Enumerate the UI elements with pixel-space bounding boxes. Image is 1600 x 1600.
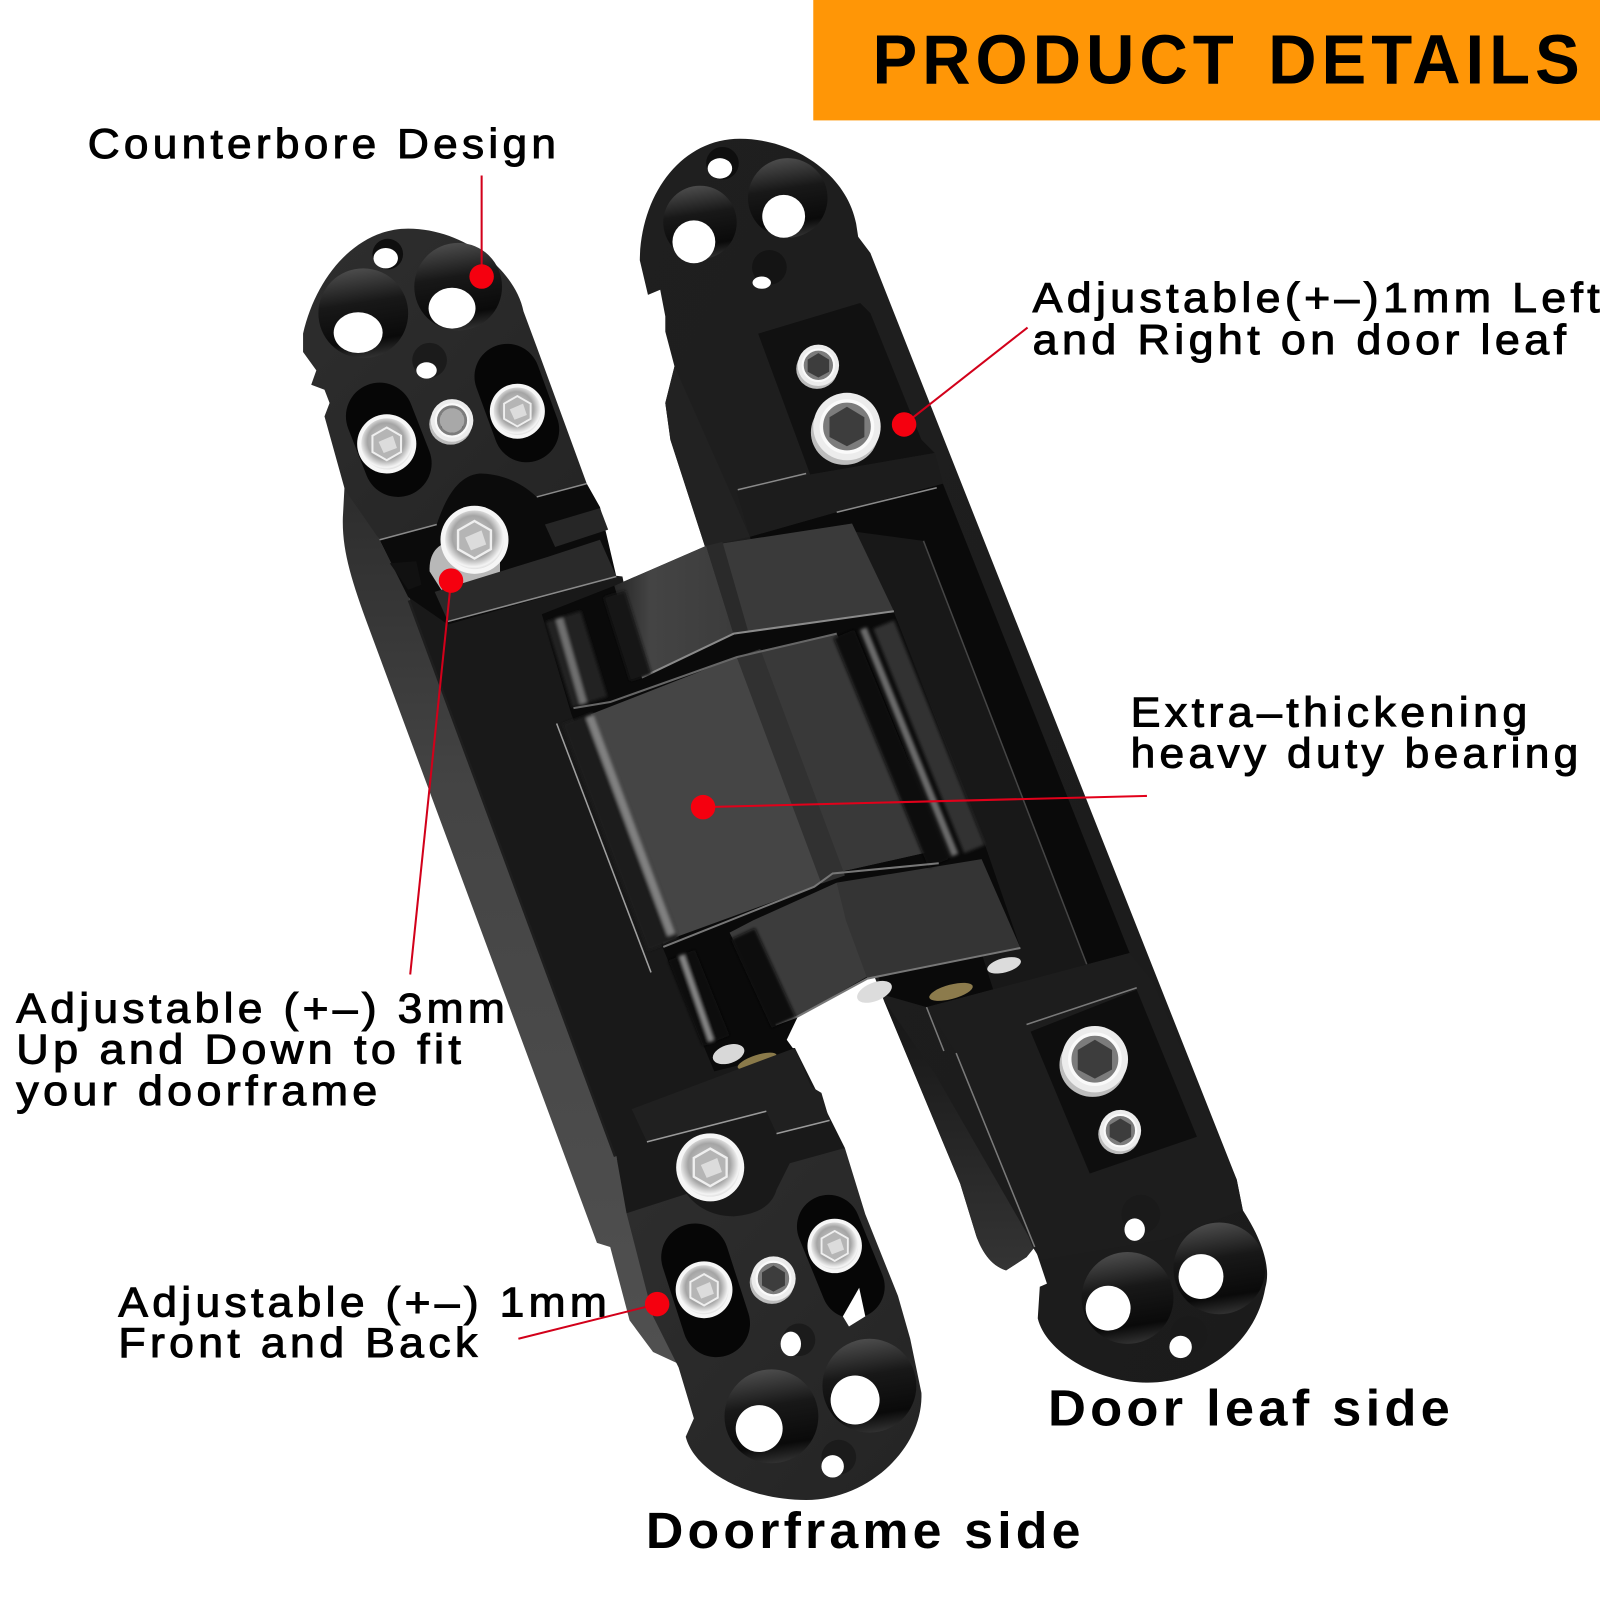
right leaf: door leaf side body: [640, 139, 1267, 1383]
right leaf bottom plate: [927, 953, 1265, 1358]
slots: [380, 377, 527, 463]
slots: [695, 1227, 853, 1323]
callout: adjustable left and right: [892, 274, 1600, 437]
callout: adjustable front and back: [118, 1278, 669, 1366]
cross bars: [435, 540, 616, 621]
callout: adjustable up and down: your doorframe: [16, 1067, 382, 1114]
left leaf: doorframe side body: [343, 480, 847, 1365]
hinge cylinders: [559, 594, 974, 1041]
right leaf upper bulge: [665, 366, 750, 547]
label: doorframe side: Doorframe side: [646, 1502, 1085, 1559]
hinge block: centre leaf: [591, 634, 929, 944]
icon: counterbore holes: [1082, 1195, 1265, 1358]
callout: adjustable up and down: Up and Down to fit: [16, 1025, 465, 1072]
icon: counterbore holes: [724, 1323, 916, 1478]
left leaf top plate: [303, 229, 616, 624]
black channel: [380, 540, 847, 1240]
callout: adjustable front and back: Adjustable (+–) 1mm: [118, 1278, 611, 1325]
icon: adjusting screws: [357, 384, 545, 602]
left leaf bottom plate: [627, 1048, 921, 1500]
hinge seam lines: [557, 634, 939, 972]
callout: adjustable up and down: [16, 568, 509, 1114]
side strip: [343, 480, 682, 1365]
right leaf inner recess: [750, 484, 1130, 1007]
bolt ends: [710, 954, 1023, 1073]
callout: counterbore design: Counterbore Design: [88, 120, 560, 167]
icon: counterbore holes: [663, 147, 828, 289]
icon: adjusting screws: [676, 1219, 862, 1318]
top cross bar: [737, 453, 943, 537]
right leaf lower bulge: [884, 1000, 1035, 1270]
callout: counterbore design: [88, 120, 560, 289]
callout: extra-thickening bearing: Extra–thickening: [1131, 689, 1532, 736]
callout: extra-thickening bearing: [691, 689, 1583, 819]
callout: adjustable left and right: Adjustable(+–)1mm Left: [1033, 274, 1600, 321]
callout: adjustable front and back: Front and Back: [118, 1319, 482, 1366]
hinge backing shadow: [542, 523, 1020, 1071]
callout: extra-thickening bearing: heavy duty bearing: [1131, 729, 1583, 776]
icon: counterbore holes: [318, 239, 502, 379]
label: door leaf side: Door leaf side: [1048, 1380, 1454, 1437]
callout: adjustable up and down: Adjustable (+–) 3mm: [16, 984, 509, 1031]
icon: adjusting screws: [1059, 1026, 1141, 1154]
banner: product details: [813, 0, 1600, 120]
right leaf top plate: [663, 147, 943, 537]
icon: adjusting screws: [796, 345, 881, 465]
callout: adjustable left and right: and Right on door leaf: [1033, 316, 1570, 363]
hinge block: bottom knuckle: [730, 859, 1020, 1024]
hinge block: top knuckle: [614, 523, 894, 678]
recess floor: [847, 531, 1087, 995]
hinge product illustration: [303, 139, 1267, 1500]
title: PRODUCT DETAILS: [872, 21, 1585, 99]
